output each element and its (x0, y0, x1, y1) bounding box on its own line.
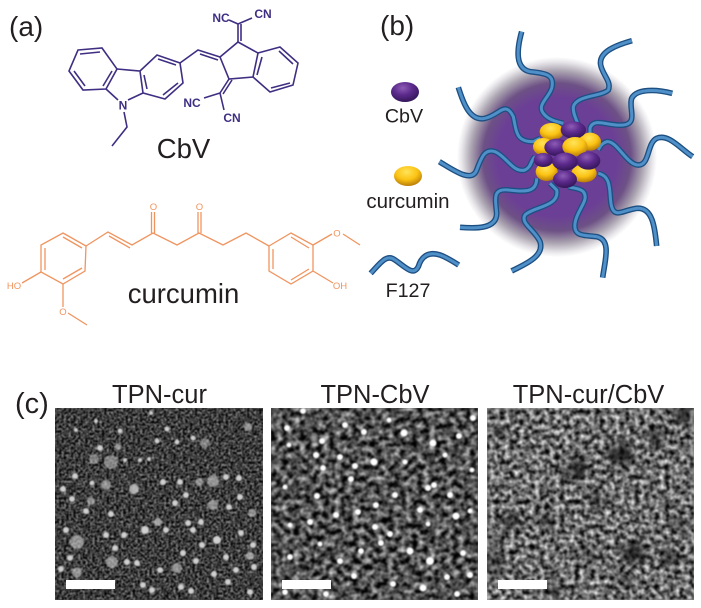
panel: CbV molecule (69, 7, 298, 164)
heading: TPN-cur/CbV: TPN-cur/CbV (513, 381, 664, 409)
atom labels: CbV: CN (223, 111, 241, 125)
panel label (c): (c) (15, 388, 49, 420)
atom labels: CbV: CN (254, 7, 272, 21)
chemical structure: CbV (69, 18, 298, 146)
atom labels: curcumin: O (59, 307, 67, 318)
chemical structure: curcumin (22, 212, 360, 325)
nanoparticle core spheres (533, 121, 601, 188)
atom labels: CbV (119, 7, 272, 125)
label: curcumin: curcumin (128, 278, 239, 309)
atom labels: curcumin: OH (333, 281, 347, 292)
label: CbV: CbV (157, 133, 211, 164)
panel: nanoparticle schematic (439, 32, 693, 278)
atom labels: curcumin: O (333, 228, 341, 240)
legend: CbV (385, 82, 424, 128)
icon: CbV sphere (391, 82, 419, 102)
scale bar (498, 580, 547, 589)
legend text: curcumin: curcumin (366, 190, 450, 213)
scale bar (282, 580, 331, 589)
heading: TPN-CbV: TPN-CbV (320, 381, 430, 409)
atom labels: CbV: N (119, 98, 127, 112)
atom labels: curcumin: O (150, 202, 157, 213)
purple glow (457, 57, 657, 257)
legend text: CbV: CbV (385, 106, 424, 128)
legend text: F127: F127 (386, 280, 430, 302)
atom labels: curcumin (7, 202, 347, 318)
micrograph: TPN-cur/CbV (486, 406, 694, 600)
panel label (a): (a) (9, 11, 43, 42)
panel: curcumin molecule (7, 202, 360, 325)
atom labels: CbV: NC (212, 11, 230, 25)
micrograph: TPN-cur (55, 408, 263, 600)
F127 polymer chains (439, 32, 693, 278)
legend: curcumin (366, 166, 450, 213)
scale bar (66, 580, 115, 589)
icon: F127 chain (371, 254, 459, 273)
atom labels: curcumin: O (196, 202, 203, 213)
legend: F127 (371, 254, 459, 302)
panel label (b): (b) (380, 10, 414, 41)
heading: TPN-cur: TPN-cur (112, 381, 207, 409)
icon: curcumin sphere (394, 166, 422, 186)
atom labels: curcumin: HO (7, 281, 21, 292)
atom labels: CbV: NC (183, 96, 201, 110)
micrograph: TPN-CbV (271, 408, 478, 600)
